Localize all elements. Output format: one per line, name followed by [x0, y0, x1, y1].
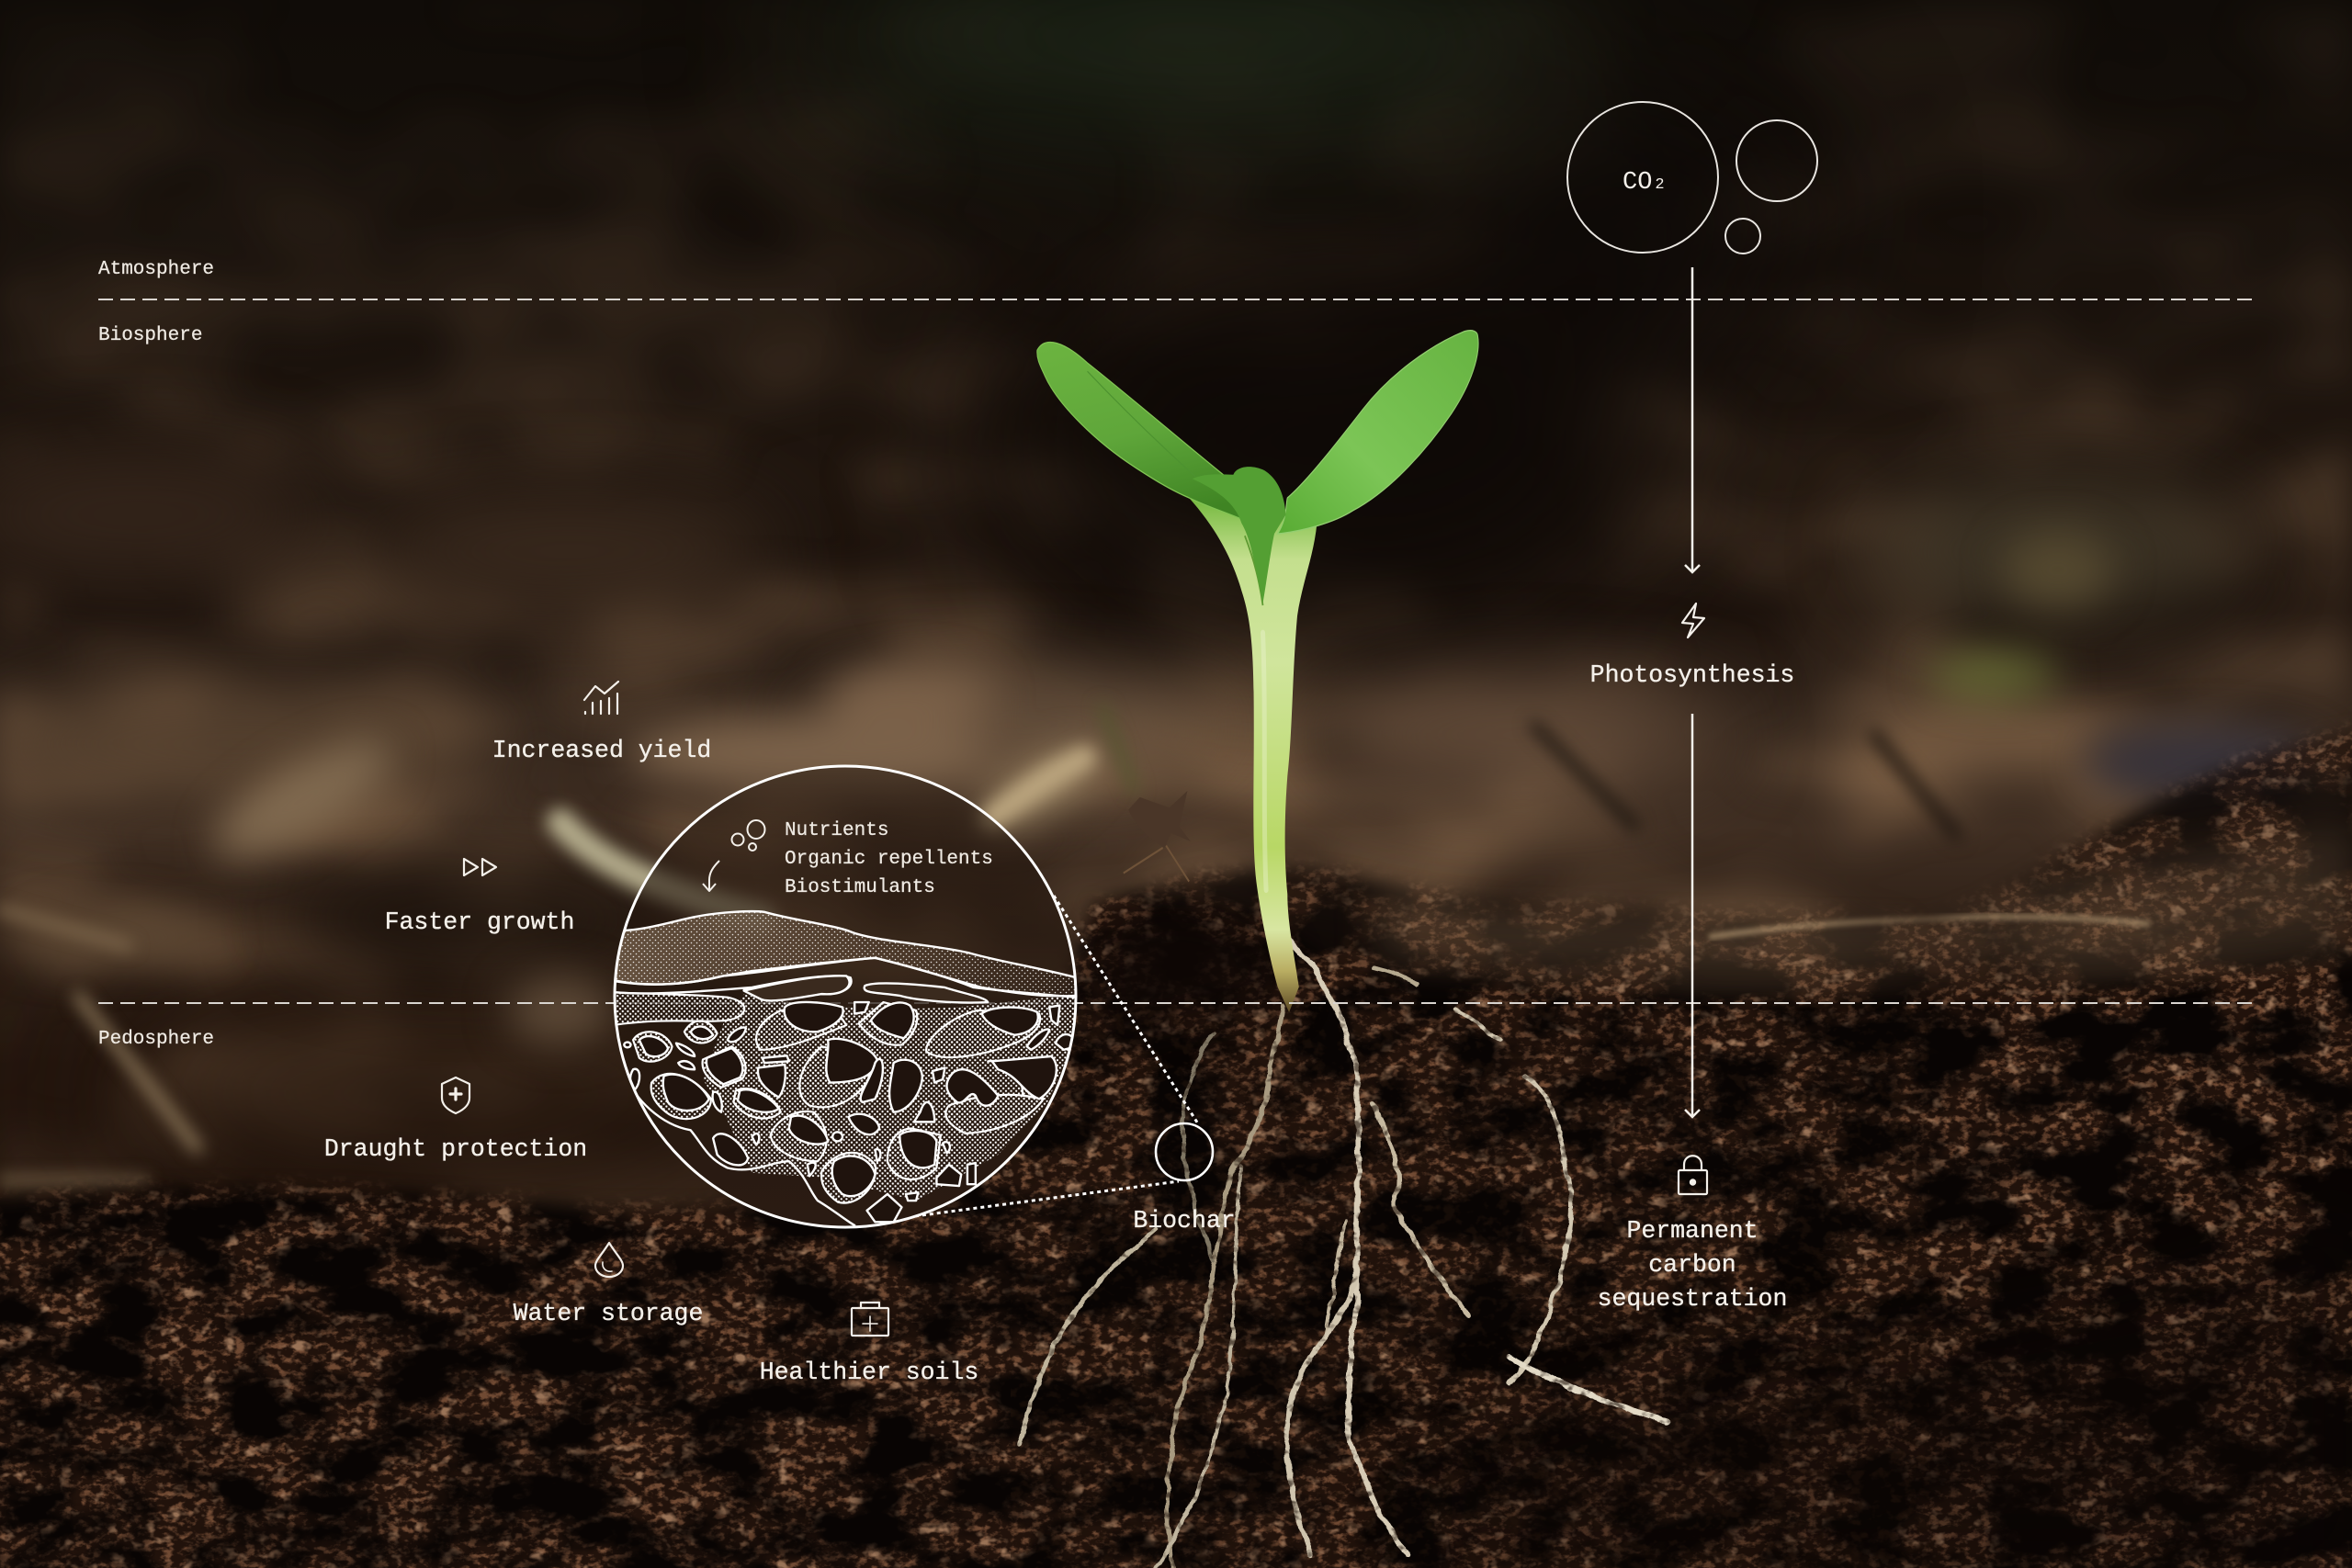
text: Photosynthesis: Photosynthesis: [1590, 661, 1794, 689]
panel: biochar magnified soil section: [613, 766, 1076, 1227]
label: Atmosphere: Atmosphere: [98, 259, 214, 280]
label: Pedosphere: Pedosphere: [98, 1029, 214, 1050]
zoom callout lines: [908, 896, 1199, 1217]
small bubble: [1725, 219, 1760, 254]
arrow: CO2 to photosynthesis: [1685, 267, 1700, 572]
icon: water drop: [595, 1243, 623, 1277]
CO2 text: CO2: [1623, 169, 1665, 197]
left dense band: [613, 992, 744, 1025]
surface dotted layer: [613, 911, 1076, 998]
icon: fast forward: [464, 859, 496, 875]
text: Increased yield: Increased yield: [492, 737, 711, 764]
dense dotted soil matrix: [703, 994, 1076, 1201]
text: biochar properties list: Nutrients: [785, 820, 888, 841]
text: Faster growth: Faster growth: [385, 908, 574, 936]
background: blurred photographic scene: [0, 0, 2352, 1214]
text: Healthier soils: Healthier soils: [760, 1359, 978, 1386]
debris on the soil: [1124, 791, 1191, 882]
text: Permanent carbon sequestration: Permanent: [1626, 1217, 1758, 1245]
surface tone layer: [613, 911, 1076, 998]
text: Water storage: Water storage: [514, 1300, 703, 1327]
CO2 circle: [1567, 102, 1718, 253]
icon: padlock: [1679, 1156, 1707, 1194]
biochar marker circle: [1156, 1123, 1213, 1180]
medium bubble: [1736, 120, 1817, 201]
upper layer outlines: [616, 958, 1076, 996]
text: Draught protection: Draught protection: [324, 1135, 587, 1163]
text: biochar properties list: Organic repellents: [785, 849, 993, 870]
text: biochar properties list: Biostimulants: [785, 877, 935, 898]
dotted halos around particles: [756, 1007, 846, 1050]
arrow: photosynthesis to sequestration: [1685, 714, 1700, 1117]
label: Biosphere: Biosphere: [98, 325, 202, 346]
stem: [1189, 498, 1317, 1012]
central bud: [1193, 467, 1286, 604]
text: Permanent carbon sequestration: carbon: [1648, 1251, 1736, 1279]
text: Biochar: Biochar: [1133, 1207, 1236, 1235]
text: Permanent carbon sequestration: sequestration: [1598, 1285, 1787, 1313]
plant roots: [1019, 931, 1668, 1568]
icon: curved down arrow: [703, 861, 719, 891]
soil specks over roots: [1011, 1001, 1929, 1568]
right leaf: [1278, 331, 1478, 534]
CO2 bubbles: [1567, 102, 1817, 254]
soil texture: [0, 689, 2352, 1568]
bottom boundary of soil matrix: [625, 1073, 854, 1225]
boundary line: biosphere / pedosphere: [98, 1002, 2256, 1004]
icon: lightning bolt: [1682, 604, 1704, 637]
plant seedling: [1037, 331, 1478, 1012]
stem fold: [1245, 536, 1263, 605]
icon: nutrient bubbles: [731, 820, 764, 851]
stem highlight: [1263, 633, 1266, 890]
left leaf: [1037, 343, 1271, 534]
left leaf midrib: [1088, 371, 1195, 477]
dark particles: [785, 1002, 843, 1032]
boundary line: atmosphere / biosphere: [98, 299, 2256, 300]
icon: first aid kit: [852, 1303, 888, 1336]
icon: shield: [442, 1077, 469, 1113]
icon: rising chart: [584, 682, 618, 714]
